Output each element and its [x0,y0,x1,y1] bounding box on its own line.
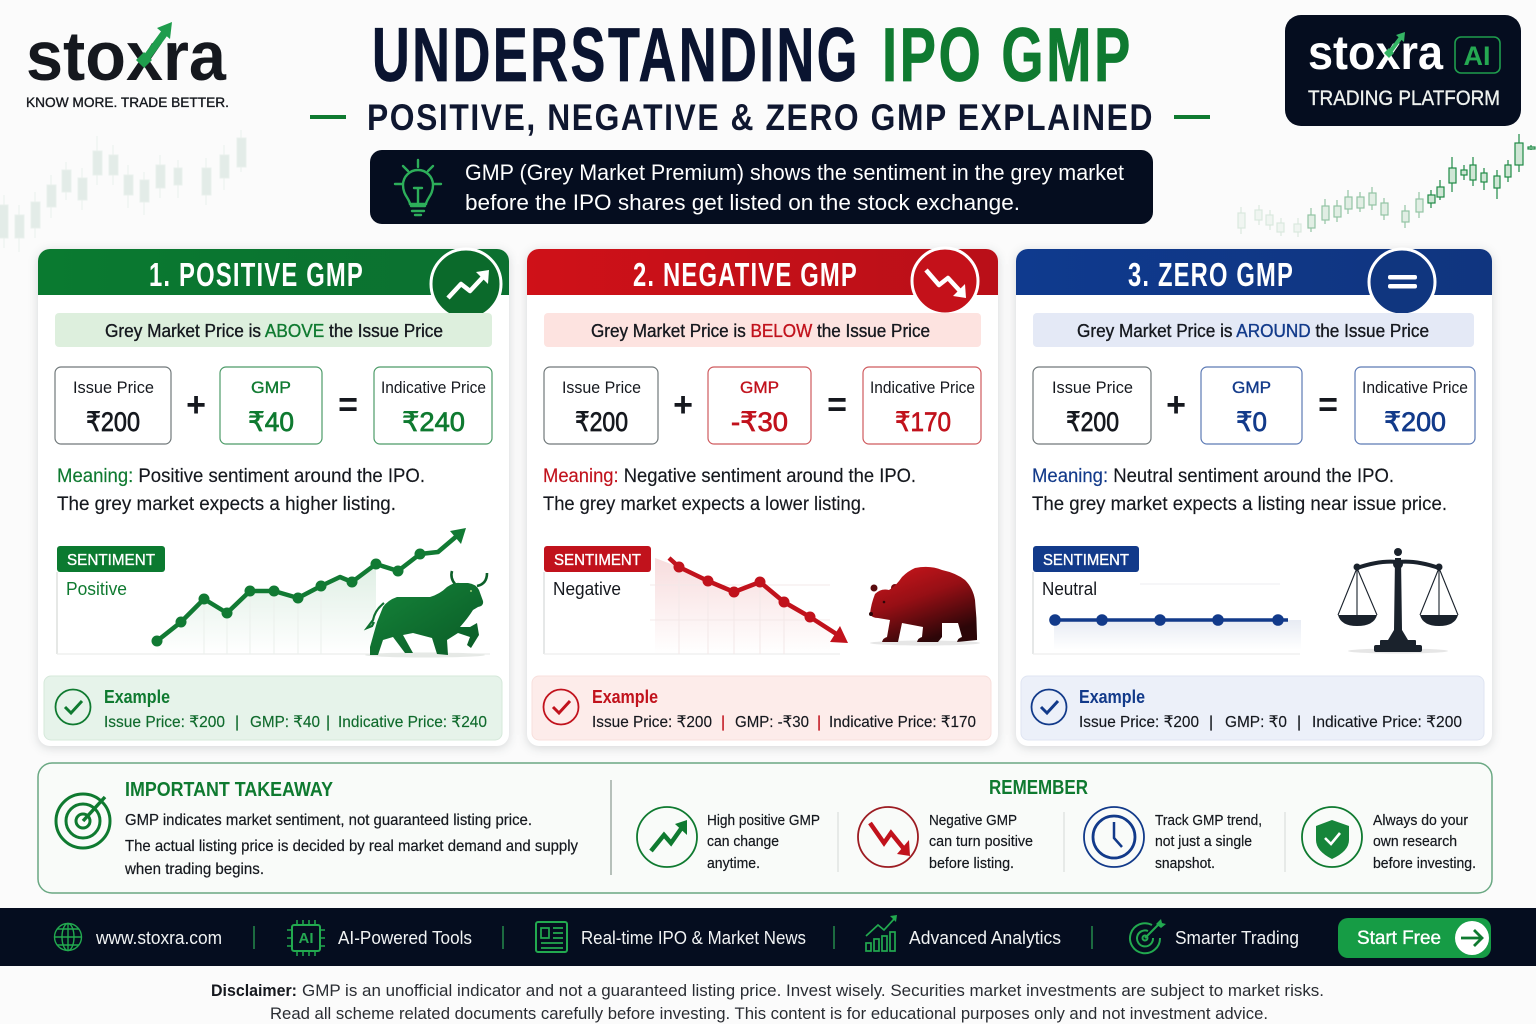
meaning text [1032,466,1447,515]
remember item: negative: Negative GMP [929,812,1017,829]
formula: ₹200 [1066,407,1119,437]
meaning text: Meaning: Negative sentiment around the IPO. [543,466,916,487]
icon: check [1032,690,1066,724]
remember item: track trend: snapshot. [1155,855,1215,872]
title: IPO GMP [882,13,1133,98]
header: negative: 2. NEGATIVE GMP [633,256,858,293]
definition pill: Grey Market Price is BELOW the Issue Price [591,321,930,341]
remember item: research: before investing. [1373,855,1476,872]
formula: Indicative Price [870,378,975,397]
formula: + [673,386,693,424]
icon: check [56,690,90,724]
formula: = [338,386,358,424]
icon: equals [1369,249,1435,315]
definition pill [544,313,981,347]
example box: Example [1079,687,1145,707]
icon: bull [365,571,487,658]
remember item: research [1302,807,1476,872]
sentiment chart: negative: SENTIMENT [554,552,641,569]
example box: Indicative Price: ₹240 [338,714,487,731]
panel: takeaway and remember [38,763,1492,893]
title: UNDERSTANDING [372,13,860,98]
example box: Indicative Price: ₹200 [1312,714,1462,731]
decorative candlestick chart right [1238,134,1535,237]
definition pill: Grey Market Price is ABOVE the Issue Price [105,321,443,341]
subtitle: POSITIVE, NEGATIVE & ZERO GMP EXPLAINED [367,97,1154,138]
formula: + [1166,386,1186,424]
formula: -₹30 [731,407,788,437]
meaning text: The grey market expects a lower listing. [543,494,866,515]
example box: Example [104,687,170,707]
takeaway text: GMP indicates market sentiment, not guaranteed listing price. [125,812,532,829]
formula: ₹0 [1236,407,1267,437]
example box: Issue Price: ₹200 [1079,714,1199,731]
remember heading: REMEMBER [989,777,1088,799]
sentiment chart: positive: SENTIMENT [67,552,155,569]
sentiment chart: positive [57,528,490,654]
example box [532,676,991,740]
formula: Indicative Price [1362,378,1468,397]
example box: | [721,714,725,731]
takeaway text: The actual listing price is decided by real market demand and supply [125,838,578,855]
remember item: research: Always do your [1373,812,1468,829]
takeaway text: IMPORTANT TAKEAWAY [125,779,334,801]
remember item: high positive [637,807,820,872]
example box: | [1297,714,1301,731]
remember item: negative [858,807,1033,872]
sentiment chart: neutral: Neutral [1042,579,1097,599]
example box: Indicative Price: ₹170 [829,714,976,731]
meaning text: Meaning: Neutral sentiment around the IPO. [1032,466,1394,487]
header: negative [527,249,998,295]
footer item: website: www.stoxra.com [95,928,222,948]
footer item: website [54,924,222,950]
header: zero: 3. ZERO GMP [1128,256,1294,293]
footer item: analytics [866,915,1061,951]
example box: GMP: -₹30 [735,714,809,731]
example box: | [235,714,239,731]
sentiment chart: neutral [1033,546,1301,654]
formula [1033,367,1475,444]
formula [55,367,492,444]
remember item: negative: can turn positive [929,833,1033,850]
example box: | [817,714,821,731]
footer item: news [536,922,806,952]
formula: + [186,386,206,424]
definition banner: GMP (Grey Market Premium) shows the sentiment in the grey market [465,160,1124,185]
panel: positive GMP [38,249,509,746]
icon: balance scale [1338,548,1458,654]
footer bar [0,908,1536,966]
remember item: track trend [1084,807,1262,872]
brand panel: stoxra AI trading platform: TRADING PLATFORM [1308,87,1500,110]
footer item: analytics: Advanced Analytics [909,928,1061,948]
example box: GMP: ₹40 [250,714,320,731]
header: zero [1016,249,1492,295]
meaning text: Meaning: Positive sentiment around the IPO. [57,466,425,487]
panel: zero GMP [1016,249,1492,746]
logo: stoxra: stoxra [26,17,227,95]
icon: bear [869,567,980,646]
takeaway text: when trading begins. [124,861,264,878]
formula: GMP [740,378,779,397]
icon: trend down [912,248,978,314]
definition pill [55,313,492,347]
brand panel: stoxra AI trading platform [1285,15,1521,126]
sentiment chart: negative [544,546,848,654]
takeaway text [124,779,578,878]
disclaimer: Disclaimer: [211,982,297,1000]
remember item: high positive: can change [707,833,779,850]
meaning text [543,466,916,515]
brand panel: stoxra AI trading platform: stoxra [1308,27,1443,80]
example box [1021,676,1484,740]
decorative candlestick chart left [0,130,246,252]
disclaimer [211,982,1324,1023]
icon: target [56,794,110,848]
meaning text [57,466,425,515]
example box: GMP: ₹0 [1225,714,1287,731]
sentiment chart: negative: Negative [553,579,621,599]
example box: | [1209,714,1213,731]
example box [44,676,502,740]
formula: Issue Price [1052,378,1133,397]
meaning text: The grey market expects a listing near issue price. [1032,494,1447,515]
header: positive: 1. POSITIVE GMP [149,256,364,293]
definition banner: before the IPO shares get listed on the stock exchange. [465,190,1020,215]
footer item: AI tools: AI [298,930,314,947]
definition pill: Grey Market Price is AROUND the Issue Price [1077,321,1429,341]
formula: ₹170 [895,407,951,437]
footer item: AI tools [287,920,472,956]
footer item: news: Real-time IPO & Market News [581,928,806,948]
brand panel: stoxra AI trading platform: AI [1464,41,1490,71]
formula: = [1318,386,1338,424]
footer item: smarter trading: Smarter Trading [1175,928,1299,948]
formula [544,367,981,444]
remember item: high positive: anytime. [707,855,760,872]
header: positive [38,249,509,295]
example box: Issue Price: ₹200 [104,714,225,731]
button: start free [1338,918,1491,958]
formula: Indicative Price [381,378,486,397]
sentiment chart: positive: Positive [66,579,127,599]
sentiment chart: neutral: SENTIMENT [1043,552,1129,569]
formula: Issue Price [73,378,154,397]
definition pill [1033,313,1474,347]
formula: = [827,386,847,424]
button: start free: Start Free [1357,928,1441,949]
panel: negative GMP [527,248,998,746]
formula: GMP [1232,378,1271,397]
remember item: track trend: Track GMP trend, [1155,812,1262,829]
formula: Issue Price [562,378,641,397]
formula: GMP [251,378,291,397]
remember item: research: own research [1373,833,1457,850]
remember item: track trend: not just a single [1155,833,1252,850]
footer item: smarter trading [1130,919,1299,953]
meaning text: The grey market expects a higher listing. [57,494,396,515]
formula: ₹200 [86,407,140,437]
formula: ₹200 [575,407,628,437]
icon: light bulb [395,160,441,215]
formula: ₹200 [1384,407,1446,437]
tagline: KNOW MORE. TRADE BETTER. [26,94,229,110]
formula: ₹240 [402,407,465,437]
formula: ₹40 [248,407,294,437]
remember item: high positive: High positive GMP [707,812,820,829]
icon: check [544,690,578,724]
example box: | [326,714,330,731]
disclaimer: GMP is an unofficial indicator and not a guaranteed listing price. Invest wisely. Securities market investments are subject to market risks. [302,982,1324,1000]
remember item: negative: before listing. [929,855,1014,872]
icon: trend up [431,249,501,319]
footer item: AI tools: AI-Powered Tools [338,928,472,948]
example box: Issue Price: ₹200 [592,714,712,731]
example box: Example [592,687,658,707]
definition banner [370,150,1153,224]
disclaimer: Read all scheme related documents carefully before investing. This content is for educational purposes only and not investment advice. [270,1005,1268,1023]
